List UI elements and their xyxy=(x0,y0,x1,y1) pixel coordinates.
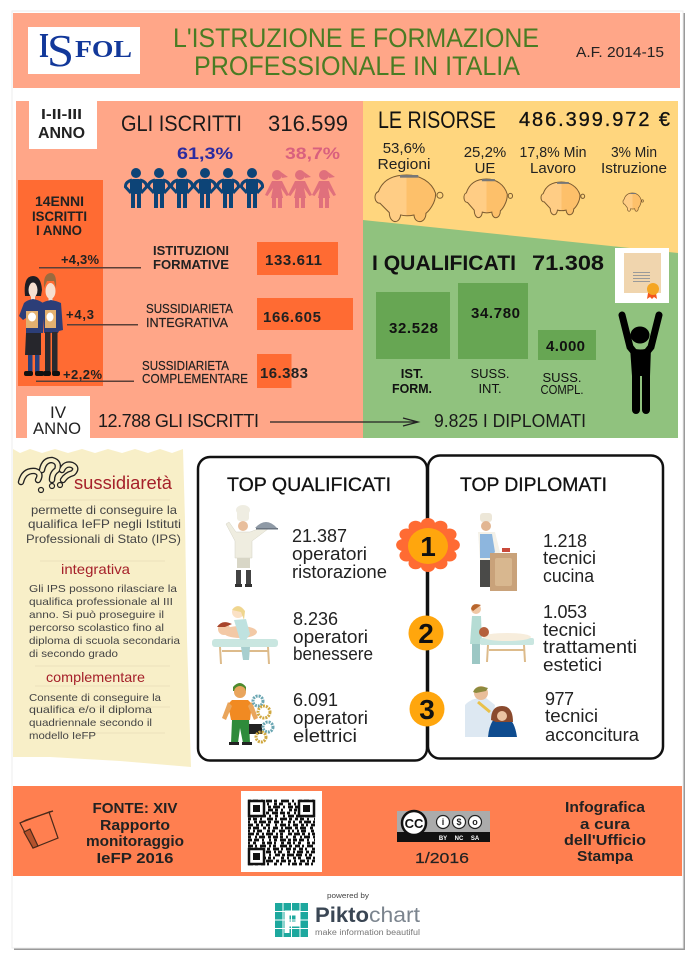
label: IV anno: IV xyxy=(50,403,67,422)
text: integrativa: anno. Si può proseguire il xyxy=(29,609,164,621)
number: iscritti total: 316.599 xyxy=(268,111,348,136)
text: complementare: modello IeFP xyxy=(29,730,96,742)
badge: rank 3 xyxy=(410,692,444,726)
boy xyxy=(44,273,56,288)
text: complementare: qualifica e/o il diploma xyxy=(29,704,152,716)
text: operatori elettrici: elettrici xyxy=(293,726,357,746)
row: sussidiarieta integrativa xyxy=(66,298,353,330)
panel: top qualificati xyxy=(198,457,427,760)
source labels xyxy=(378,140,667,177)
license: creative commons xyxy=(397,811,490,842)
text: fonte: IeFP 2016 xyxy=(96,850,174,867)
text: tecnici trattamenti: trattamenti xyxy=(543,637,637,657)
text: definition xyxy=(26,503,181,546)
label: I-II-III anno xyxy=(29,101,97,149)
text: tecnici trattamenti xyxy=(543,602,637,675)
text: definition: permette di conseguire la xyxy=(31,503,177,517)
text: credits: Stampa xyxy=(577,848,634,865)
text: tecnici acconcitura xyxy=(545,689,640,745)
heading: integrativa: integrativa xyxy=(61,561,130,577)
bar: ist. form.: IST. xyxy=(401,366,423,381)
logo: piktochart: powered by xyxy=(327,891,369,900)
license: creative commons: SA xyxy=(471,836,480,842)
text: tecnici acconcitura: acconcitura xyxy=(545,725,640,745)
title: L'ISTRUZIONE E FORMAZIONE xyxy=(173,23,539,53)
icon: male pictograms xyxy=(125,168,263,208)
text: fonte: FONTE: XIV xyxy=(92,800,178,817)
badge: rank 3: 3 xyxy=(419,694,435,725)
female share: 38,7% xyxy=(285,144,340,163)
panel: iscritti xyxy=(16,101,363,438)
bar: suss. int. xyxy=(458,283,528,396)
diplomati: 9.825 I DIPLOMATI xyxy=(434,411,586,431)
badge: rank 2: 2 xyxy=(418,618,434,649)
text: tecnici cucina: cucina xyxy=(543,566,595,586)
wordmark: chart xyxy=(369,904,420,927)
label: I-II-III anno: I-II-III xyxy=(41,106,82,123)
source labels: 25,2% xyxy=(464,144,506,161)
wordmark xyxy=(315,904,420,927)
text: definition: qualifica IeFP negli Istituti xyxy=(28,517,181,531)
bar: suss. int.: INT. xyxy=(478,381,502,396)
text: complementare: quadriennale secondo il xyxy=(29,717,152,729)
icon: piggy bank istruzione xyxy=(623,193,643,211)
panel: header xyxy=(13,13,680,88)
icon: certificate xyxy=(615,248,669,303)
logo: piktochart xyxy=(275,891,420,937)
badge: rank 1 xyxy=(396,518,460,572)
icon: students xyxy=(19,273,63,376)
qr code xyxy=(241,791,322,872)
row: sussidiarieta integrativa: +4,3 xyxy=(66,307,94,322)
tagline: make information beautiful xyxy=(315,928,420,937)
panel: i qualificati xyxy=(363,220,678,438)
license: creative commons: i xyxy=(442,817,444,827)
bar: suss. int.: 34.780 xyxy=(471,305,520,322)
icon: chef xyxy=(226,505,278,587)
text: integrativa xyxy=(29,583,180,660)
number: risorse total: 486.399.972 € xyxy=(519,109,670,131)
number: qualificati total: 71.308 xyxy=(532,252,604,275)
panel: le risorse xyxy=(363,101,678,256)
icon: piggy bank UE xyxy=(464,179,513,218)
heading: top qualificati: TOP QUALIFICATI xyxy=(227,475,391,496)
text: tecnici trattamenti: tecnici xyxy=(543,620,596,640)
arrow: iscritti to diplomati xyxy=(270,418,418,426)
panel: 14enni xyxy=(18,180,103,386)
icon: female pictograms xyxy=(265,170,336,208)
decorative rules xyxy=(30,500,170,733)
badge: rank 2 xyxy=(408,616,444,650)
icon: cook xyxy=(478,513,517,591)
text: operatori benessere xyxy=(293,609,373,664)
text: credits xyxy=(564,799,646,865)
source labels: 53,6% xyxy=(383,140,425,157)
row: sussidiarieta complementare: COMPLEMENTARE xyxy=(142,371,248,386)
text: integrativa: di secondo grado xyxy=(29,648,118,660)
text: operatori elettrici: operatori xyxy=(293,708,368,728)
wordmark: Pikto xyxy=(315,904,369,927)
title: PROFESSIONALE IN ITALIA xyxy=(194,51,520,81)
text: tecnici cucina: 1.218 xyxy=(543,531,587,551)
text: fonte: Rapporto xyxy=(100,817,170,834)
text: tecnici acconcitura: tecnici xyxy=(545,706,598,726)
text: operatori benessere: 8.236 xyxy=(293,609,338,629)
source labels: UE xyxy=(475,160,495,177)
icon: beautician xyxy=(470,604,534,664)
text: credits: Infografica xyxy=(565,799,646,816)
bar: suss. compl.: COMPL. xyxy=(540,382,584,397)
logo: ISFOL: S xyxy=(47,25,74,76)
text: credits: dell'Ufficio xyxy=(564,832,646,849)
row: istituzioni formative: ISTITUZIONI xyxy=(153,243,229,258)
icon: question marks xyxy=(21,460,75,492)
text: tecnici acconcitura: 977 xyxy=(545,689,574,709)
source labels: Istruzione xyxy=(601,160,667,177)
icon: electrician xyxy=(222,683,273,745)
row: istituzioni formative: +4,3% xyxy=(61,252,99,267)
heading: complementare: complementare xyxy=(46,669,145,685)
icon: piggy bank regioni xyxy=(375,175,443,222)
row: sussidiarieta integrativa: INTEGRATIVA xyxy=(146,315,228,330)
source labels: Lavoro xyxy=(530,160,576,177)
license: creative commons: o xyxy=(472,817,478,827)
text: operatori ristorazione: ristorazione xyxy=(292,562,387,582)
panel: 14enni: 14ENNI xyxy=(35,193,84,209)
text: definition: Professionali di Stato (IPS) xyxy=(26,532,181,546)
badge: rank 1: 1 xyxy=(420,531,436,562)
license: creative commons: CC xyxy=(405,816,424,831)
row: istituzioni formative: FORMATIVE xyxy=(153,257,229,272)
text: credits: a cura xyxy=(580,816,631,833)
date: 1/2016 xyxy=(415,850,469,867)
row: sussidiarieta complementare: 16.383 xyxy=(260,365,308,382)
bar: ist. form.: 32.528 xyxy=(389,320,438,337)
icon: piggy bank lavoro xyxy=(541,182,585,215)
panel: top diplomati xyxy=(428,456,663,758)
row: sussidiarieta complementare: SUSSIDIARIETA xyxy=(142,358,229,373)
icon: massage xyxy=(212,606,278,664)
text: fonte xyxy=(86,800,184,867)
iscritti IV anno: 12.788 GLI ISCRITTI xyxy=(98,411,259,431)
icon: hairdresser xyxy=(465,686,517,737)
text: operatori elettrici: 6.091 xyxy=(293,690,338,710)
bar: suss. int.: SUSS. xyxy=(470,366,510,381)
row: sussidiarieta complementare xyxy=(36,354,308,388)
license: creative commons: NC xyxy=(455,836,464,842)
text: integrativa: qualifica professionale al III xyxy=(29,596,173,608)
text: operatori benessere: benessere xyxy=(293,644,373,664)
panel: 14enni: ISCRITTI xyxy=(32,208,87,224)
row: istituzioni formative: 133.611 xyxy=(265,252,322,269)
text: operatori ristorazione xyxy=(292,526,387,582)
logo mark xyxy=(275,903,308,937)
heading: le risorse: LE RISORSE xyxy=(378,107,496,134)
text: complementare xyxy=(29,692,161,742)
male share: 61,3% xyxy=(177,144,233,163)
icon: book xyxy=(20,811,58,848)
row: istituzioni formative xyxy=(39,242,338,275)
source labels: 17,8% Min xyxy=(520,144,586,161)
bar: suss. compl.: 4.000 xyxy=(546,338,585,355)
source labels: 3% Min xyxy=(611,144,657,161)
label: I-II-III anno: ANNO xyxy=(38,125,85,142)
row: sussidiarieta integrativa: 166.605 xyxy=(263,309,321,326)
license: creative commons: $ xyxy=(456,817,462,827)
bar: suss. compl. xyxy=(538,330,596,397)
text: tecnici trattamenti: 1.053 xyxy=(543,602,587,622)
license: creative commons: BY xyxy=(439,836,447,842)
label: IV anno xyxy=(27,396,90,438)
source labels: Regioni xyxy=(378,156,430,173)
text: integrativa: percorso scolastico fino al xyxy=(29,622,164,634)
text: operatori ristorazione: 21.387 xyxy=(292,526,347,546)
icon: celebrating person xyxy=(622,315,659,414)
text: operatori ristorazione: operatori xyxy=(292,544,367,564)
logo: ISFOL: FOL xyxy=(75,37,132,63)
label: IV anno: ANNO xyxy=(33,419,81,438)
bar: ist. form. xyxy=(376,292,450,396)
bar: suss. compl.: SUSS. xyxy=(542,370,582,385)
text: complementare: Consente di conseguire la xyxy=(29,692,161,704)
panel: footer xyxy=(13,786,682,876)
logo: ISFOL xyxy=(28,25,140,76)
text: integrativa: diploma di scuola secondaria xyxy=(29,635,180,647)
heading: sussidiarieta: sussidiaretà xyxy=(74,473,173,493)
academic year: A.F. 2014-15 xyxy=(576,44,664,61)
panel: sussidiarieta note xyxy=(13,449,191,767)
text: tecnici cucina: tecnici xyxy=(543,548,596,568)
text: tecnici cucina xyxy=(543,531,596,586)
logo: ISFOL: I xyxy=(39,26,49,65)
text: operatori elettrici xyxy=(293,690,368,746)
heading: i qualificati: I QUALIFICATI xyxy=(372,252,516,275)
text: tecnici trattamenti: estetici xyxy=(543,655,602,675)
panel: 14enni: I ANNO xyxy=(36,222,82,238)
row: sussidiarieta complementare: +2,2% xyxy=(63,367,102,382)
girl xyxy=(25,276,42,296)
bar: ist. form.: FORM. xyxy=(392,381,432,396)
heading: gli iscritti: GLI ISCRITTI xyxy=(121,111,242,136)
heading: top diplomati: TOP DIPLOMATI xyxy=(460,475,607,496)
text: integrativa: Gli IPS possono rilasciare la xyxy=(29,583,177,595)
title xyxy=(173,23,539,81)
text: fonte: monitoraggio xyxy=(86,833,184,850)
row: sussidiarieta integrativa: SUSSIDIARIETA xyxy=(146,301,233,316)
text: operatori benessere: operatori xyxy=(293,627,368,647)
